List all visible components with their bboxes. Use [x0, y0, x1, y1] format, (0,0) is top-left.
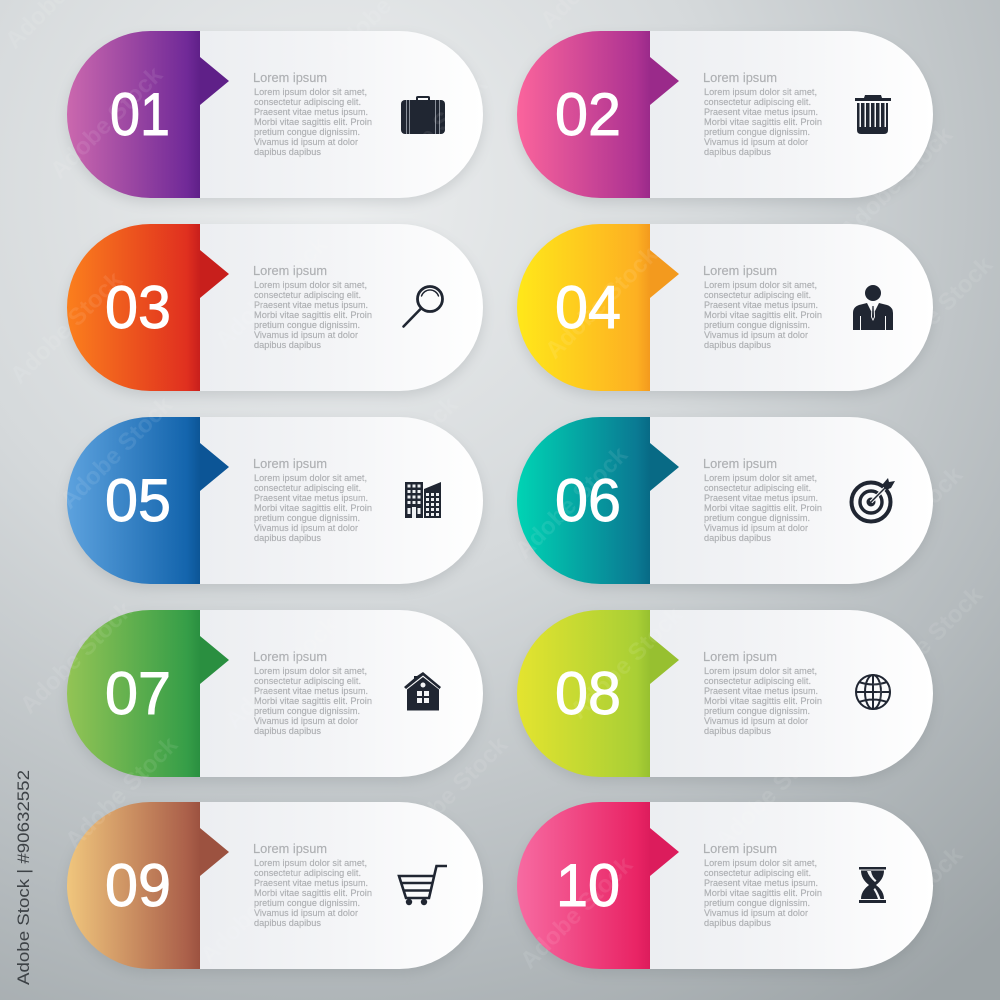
card 04: pretium congue dignissim.: [704, 319, 810, 330]
card 10: Morbi vitae sagittis elit. Proin: [704, 887, 822, 898]
card 05: [66, 417, 484, 589]
card 08: Lorem ipsum: [703, 650, 777, 664]
watermark: Adobe Stock: [710, 731, 833, 854]
card 06: Praesent vitae metus ipsum.: [704, 492, 818, 503]
card 01: consectetur adipiscing elit.: [254, 96, 361, 107]
card 06: consectetur adipiscing elit.: [704, 482, 811, 493]
card 03: Vivamus id ipsum at dolor: [254, 329, 358, 340]
card 03: dapibus dapibus: [254, 339, 321, 350]
card 01: Lorem ipsum: [253, 71, 327, 85]
card 04: Morbi vitae sagittis elit. Proin: [704, 309, 822, 320]
card 07: [66, 610, 484, 782]
card 03: consectetur adipiscing elit.: [254, 289, 361, 300]
card 07: Lorem ipsum: [253, 650, 327, 664]
card 10: [516, 802, 934, 974]
watermark: Adobe Stock: [220, 611, 343, 734]
card 10: pretium congue dignissim.: [704, 897, 810, 908]
card 09: Lorem ipsum dolor sit amet,: [254, 857, 367, 868]
card 07: 07: [105, 660, 171, 727]
card 03: [66, 224, 484, 396]
watermark: Adobe Stock: [835, 121, 958, 244]
card 10: 10: [556, 852, 620, 919]
card 06: 06: [555, 467, 621, 534]
card 04: Praesent vitae metus ipsum.: [704, 299, 818, 310]
card 04: Vivamus id ipsum at dolor: [704, 329, 808, 340]
card 02: [516, 31, 934, 203]
card 06: Lorem ipsum dolor sit amet,: [704, 472, 817, 483]
card 10: consectetur adipiscing elit.: [704, 867, 811, 878]
card 06: Vivamus id ipsum at dolor: [704, 522, 808, 533]
card 08: Praesent vitae metus ipsum.: [704, 685, 818, 696]
card 01: Praesent vitae metus ipsum.: [254, 106, 368, 117]
card 06: dapibus dapibus: [704, 532, 771, 543]
card 06: Morbi vitae sagittis elit. Proin: [704, 502, 822, 513]
card 10: Lorem ipsum dolor sit amet,: [704, 857, 817, 868]
watermark: Adobe Stock: [60, 731, 183, 854]
card 07: Vivamus id ipsum at dolor: [254, 715, 358, 726]
card 05: dapibus dapibus: [254, 532, 321, 543]
card 03: pretium congue dignissim.: [254, 319, 360, 330]
card 09: Morbi vitae sagittis elit. Proin: [254, 887, 372, 898]
watermark: Adobe Stock: [370, 71, 493, 194]
card 03: Praesent vitae metus ipsum.: [254, 299, 368, 310]
card 10: Vivamus id ipsum at dolor: [704, 907, 808, 918]
card 02: Praesent vitae metus ipsum.: [704, 106, 818, 117]
card 09: Lorem ipsum: [253, 842, 327, 856]
watermark: Adobe Stock: [55, 391, 178, 514]
icon: office buildings: [405, 482, 441, 518]
card 05: Lorem ipsum: [253, 457, 327, 471]
card 03: 03: [105, 274, 171, 341]
icon: businessman: [853, 285, 893, 330]
card 05: 05: [105, 467, 171, 534]
card 08: pretium congue dignissim.: [704, 705, 810, 716]
watermark: Adobe Stock: [845, 461, 968, 584]
card 08: consectetur adipiscing elit.: [704, 675, 811, 686]
card 07: Praesent vitae metus ipsum.: [254, 685, 368, 696]
card 03: Lorem ipsum: [253, 264, 327, 278]
card 07: dapibus dapibus: [254, 725, 321, 736]
card 09: dapibus dapibus: [254, 917, 321, 928]
card 02: Lorem ipsum: [703, 71, 777, 85]
card 02: dapibus dapibus: [704, 146, 771, 157]
card 05: pretium congue dignissim.: [254, 512, 360, 523]
card 09: consectetur adipiscing elit.: [254, 867, 361, 878]
card 03: Morbi vitae sagittis elit. Proin: [254, 309, 372, 320]
card 09: Vivamus id ipsum at dolor: [254, 907, 358, 918]
card 05: Morbi vitae sagittis elit. Proin: [254, 502, 372, 513]
watermark: Adobe Stock: [210, 231, 333, 354]
icon: briefcase: [401, 96, 445, 134]
card 02: Vivamus id ipsum at dolor: [704, 136, 808, 147]
card 05: Vivamus id ipsum at dolor: [254, 522, 358, 533]
card 03: Lorem ipsum dolor sit amet,: [254, 279, 367, 290]
card 01: Lorem ipsum dolor sit amet,: [254, 86, 367, 97]
card 07: pretium congue dignissim.: [254, 705, 360, 716]
card 08: Lorem ipsum dolor sit amet,: [704, 665, 817, 676]
card 02: 02: [555, 81, 621, 148]
card 07: consectetur adipiscing elit.: [254, 675, 361, 686]
watermark: Adobe Stock: [195, 846, 318, 969]
watermark: Adobe Stock: [510, 441, 633, 564]
card 09: pretium congue dignissim.: [254, 897, 360, 908]
card 02: Morbi vitae sagittis elit. Proin: [704, 116, 822, 127]
watermark: Adobe Stock: [45, 61, 168, 184]
watermark: Adobe Stock: [5, 266, 128, 389]
card 05: consectetur adipiscing elit.: [254, 482, 361, 493]
icon: trash can: [855, 95, 891, 134]
icon: target with arrow: [852, 478, 895, 522]
card 10: dapibus dapibus: [704, 917, 771, 928]
card 08: dapibus dapibus: [704, 725, 771, 736]
watermark: Adobe Stock: [515, 851, 638, 974]
card 01: pretium congue dignissim.: [254, 126, 360, 137]
card 05: Lorem ipsum dolor sit amet,: [254, 472, 367, 483]
icon: hourglass: [859, 867, 886, 903]
card 04: Lorem ipsum dolor sit amet,: [704, 279, 817, 290]
card 06: [516, 417, 934, 589]
card 01: 01: [110, 81, 170, 148]
card 07: Morbi vitae sagittis elit. Proin: [254, 695, 372, 706]
icon: globe: [856, 675, 890, 709]
watermark: Adobe Stock: [875, 251, 998, 374]
watermark: Adobe Stock: [390, 731, 513, 854]
card 10: Lorem ipsum: [703, 842, 777, 856]
card 02: consectetur adipiscing elit.: [704, 96, 811, 107]
card 04: consectetur adipiscing elit.: [704, 289, 811, 300]
watermark: Adobe Stock: [565, 601, 688, 724]
card 09: [66, 802, 484, 974]
card 01: [66, 31, 484, 203]
card 01: Morbi vitae sagittis elit. Proin: [254, 116, 372, 127]
watermark: Adobe Stock: [340, 391, 463, 514]
card 09: Praesent vitae metus ipsum.: [254, 877, 368, 888]
card 05: Praesent vitae metus ipsum.: [254, 492, 368, 503]
card 01: dapibus dapibus: [254, 146, 321, 157]
icon: magnifying glass: [404, 286, 442, 326]
card 10: Praesent vitae metus ipsum.: [704, 877, 818, 888]
card 08: 08: [555, 660, 621, 727]
card 04: Lorem ipsum: [703, 264, 777, 278]
card 08: Morbi vitae sagittis elit. Proin: [704, 695, 822, 706]
watermark: Adobe Stock: [540, 241, 663, 364]
watermark: Adobe Stock: [845, 841, 968, 964]
watermark: Adobe Stock: [865, 581, 988, 704]
stock ID label: Adobe Stock | #90632552: [15, 770, 33, 985]
watermark: Adobe Stock: [705, 51, 828, 174]
card 01: Vivamus id ipsum at dolor: [254, 136, 358, 147]
icon: house: [404, 672, 441, 710]
card 04: dapibus dapibus: [704, 339, 771, 350]
card 02: pretium congue dignissim.: [704, 126, 810, 137]
icon: shopping cart: [399, 866, 447, 905]
card 09: 09: [105, 852, 171, 919]
card 08: [516, 610, 934, 782]
card 04: [516, 224, 934, 396]
card 06: pretium congue dignissim.: [704, 512, 810, 523]
card 06: Lorem ipsum: [703, 457, 777, 471]
card 02: Lorem ipsum dolor sit amet,: [704, 86, 817, 97]
card 04: 04: [555, 274, 621, 341]
card 07: Lorem ipsum dolor sit amet,: [254, 665, 367, 676]
watermark: Adobe Stock: [15, 596, 138, 719]
card 08: Vivamus id ipsum at dolor: [704, 715, 808, 726]
